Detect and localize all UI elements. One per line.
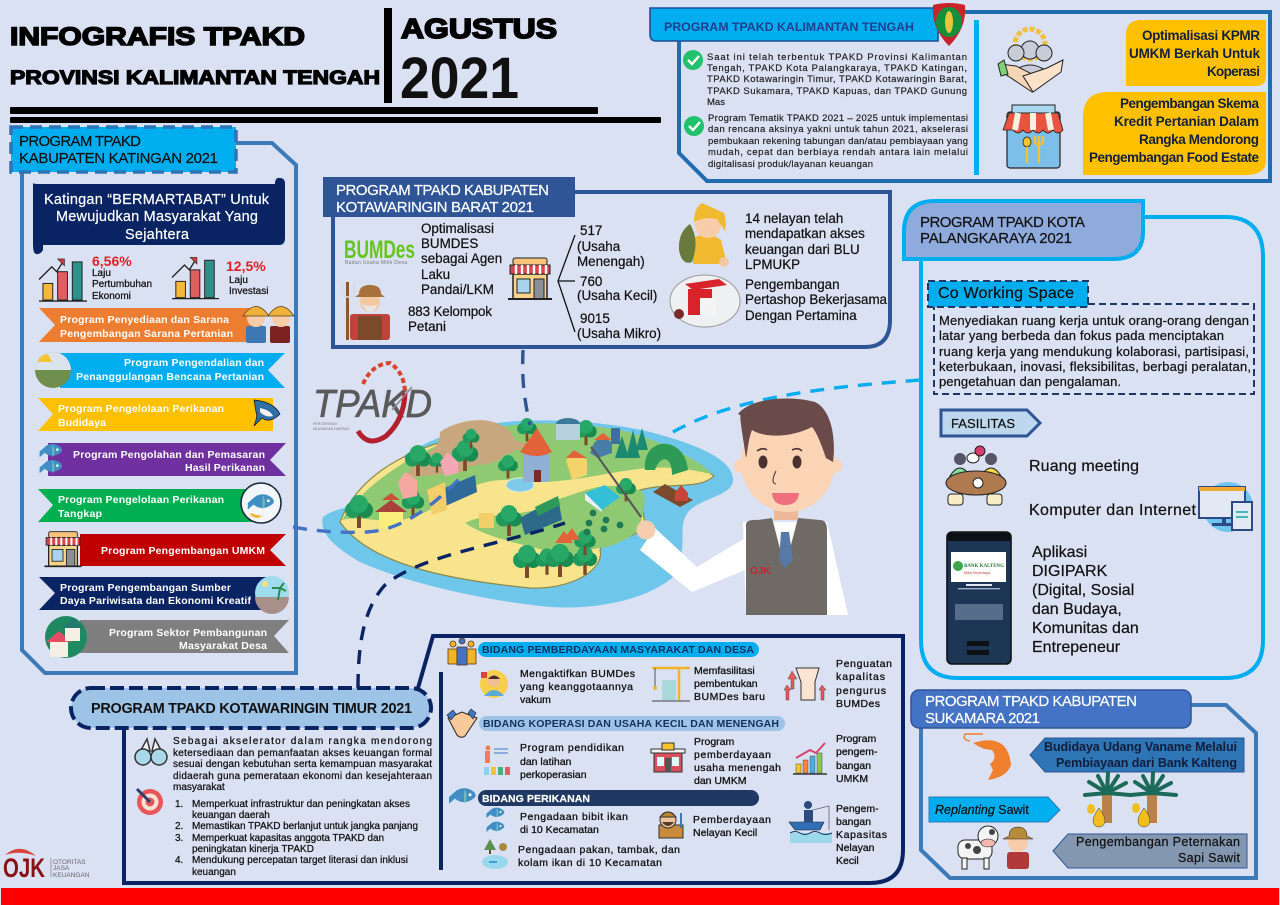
icon: beach [255,576,289,614]
icon: shrimp [964,734,1011,780]
paragraph: tpakd formed: Tengah, TPAKD Kota Palangkaraya, TPAKD Katingan, [707,63,967,74]
paragraph: tpakd formed: TPAKD Sukamara, TPAKD Kapuas, dan TPAKD Gunung [707,86,967,97]
section: koperasi: bangan [836,760,871,772]
medium business count: 517 [580,223,602,238]
branch lines [558,235,575,332]
upper land [342,423,712,521]
vest logo: OJK [750,566,771,577]
icon: community [448,638,476,665]
section: perikanan: bangan [836,816,871,828]
icon: oil palms [1085,773,1176,827]
section: perikanan: Pemberdayaan [693,814,771,826]
icon: fisherman [679,203,729,267]
panel: kotawaringin barat: Laku [421,267,450,282]
icon: crane [652,668,690,701]
arrow: shrimp farming: Budidaya Udang Vaname Melalui [1044,740,1237,754]
section: perikanan: Kapasitas [836,829,887,841]
arrow: replanting: Replanting Sawit [935,803,1029,817]
katingan outline [22,143,296,673]
icon: fish pair [40,444,62,473]
year: 2021 [400,46,519,111]
panel: kotawaringin barat: Petani [408,319,446,334]
teal building [585,485,620,512]
nelayan text: 14 nelayan telah [745,211,843,226]
check icon two [684,116,704,136]
arrow: shrimp farming: Pembiayaan dari Bank Kalteng [1056,756,1237,770]
fasilitas tag: FASILITAS [951,416,1015,431]
paragraph: accelerator: didaerah guna pemerataan ekonomi dan kesejahteraan [173,771,432,782]
brows [757,449,802,451]
numbered list [175,799,418,878]
section: perikanan: BIDANG PERIKANAN [482,793,590,805]
row houses [428,475,477,512]
icon: pertashop [670,275,740,327]
icon: handshake with people [998,29,1063,92]
ribbon 7 navy [39,576,289,614]
ribbon 4 purple [40,443,286,476]
pertashop text: Pengembangan [745,277,840,292]
panel: kotawaringin timur [71,636,903,883]
panel: palangkaraya: PROGRAM TPAKD KOTA [920,214,1085,231]
icon: fish plate [241,483,281,523]
panel: kotawaringin barat: PROGRAM TPAKD KABUPATEN [336,182,549,199]
numbered list: keuangan [192,867,236,878]
green roof building [520,496,562,535]
nose [773,471,776,484]
panel: kotawaringin barat: keuangan dari BLU [745,242,860,257]
paragraph: tpakd formed: Saat ini telah terbentuk TPAKD Provinsi Kalimantan [707,52,967,63]
facility: computer text: Komputer dan Internet [1029,502,1197,519]
logo: tpakd [313,363,432,441]
sukamara outline [921,705,1256,878]
face [741,412,835,512]
logo: tpakd: PERCEPATAN [313,422,337,426]
illustration: presenter [591,398,848,615]
paragraph: accelerator: sesuai dengan kebutuhan serta kemampuan masyarakat [173,759,432,770]
digipark text: (Digital, Sosial [1032,582,1134,599]
panel: katingan: Mewujudkan Masyarakat Yang [56,209,258,225]
kalteng outline [679,12,1270,181]
pond [506,478,534,492]
co working description: pengetahuan dan pengalaman. [939,374,1121,389]
connector: timur [358,523,565,688]
bumdes text: Optimalisasi [421,221,494,236]
numbered list: 1. [175,799,183,810]
logo: bumdes: Badan Usaha Milik Desa [345,260,407,266]
logo: ojk [3,849,90,883]
panel: kotawaringin barat: (Usaha Mikro) [577,326,661,341]
section: koperasi: dan UMKM [694,775,747,787]
paragraph: tpakd formed: TPAKD Kotawaringin Timur, TPAKD Kotawaringin Barat, [707,74,967,85]
numbered list: 4. [175,855,183,866]
ribbon 7 navy: Program Pengembangan Sumber [60,582,231,594]
paragraph: accelerator [173,736,432,793]
icon: fist up [784,668,826,700]
conifers [615,428,648,458]
farmer group text: 883 Kelompok [408,304,492,319]
ribbon 2 blue: Penanggulangan Bencana Pertanian [76,371,264,383]
hand [636,520,656,540]
arm [640,528,750,592]
icon: person circle [480,670,508,698]
logo: ojk: OJK [3,853,45,883]
section: koperasi: pengem- [836,746,878,758]
callout: food estate: Pengembangan Skema [1120,96,1259,111]
numbered list: 2. [175,821,183,832]
panel: kalimantan tengah: PROGRAM TPAKD KALIMANTAN TENGAH [664,20,914,34]
section: perikanan: Kecil [836,855,859,867]
icon: binoculars [135,739,167,765]
panel: kotawaringin barat: Menengah) [577,254,645,269]
hair [738,398,834,462]
month: AGUSTUS [401,13,557,44]
icon: emblem [933,3,965,46]
panel: katingan: Sejahtera [125,227,190,243]
panel: kotawaringin barat: LPMUKP [745,257,800,272]
panel: kotawaringin barat: Pandai/LKM [421,282,494,297]
section: pemberdayaan: kapalitas [836,671,885,683]
connector: katingan [293,473,465,532]
paragraph: tematik program: pembukaan rekening tabungan dan/atau pembiayaan yang [708,136,968,147]
icon: food store [1003,105,1063,168]
ribbon 1 orange [39,306,294,343]
paragraph: accelerator: masyarakat [173,782,225,793]
panel: kotawaringin barat: mendapatkan akses [745,226,865,241]
panel: palangkaraya: PALANGKARAYA 2021 [920,230,1072,247]
slogan text: Katingan “BERMARTABAT” Untuk [44,192,270,208]
section: perikanan: Nelayan [836,842,875,854]
numbered list: 3. [175,833,183,844]
section: koperasi: pemberdayaan [694,749,771,761]
stat: growth: Pertumbuhan [92,279,152,290]
icon: boat [789,801,832,843]
arrow: cattle: Pengembangan Peternakan [1076,835,1240,849]
panel: kotawaringin barat: KOTAWARINGIN BARAT 2021 [336,199,534,216]
panel: katingan: KABUPATEN KATINGAN 2021 [19,150,218,167]
panel: sukamara: SUKAMARA 2021 [925,710,1040,727]
section: koperasi: BIDANG KOPERASI DAN USAHA KECIL DAN MENENGAH [483,718,779,730]
numbered list: keuangan daerah [192,810,270,821]
panel: kotawaringin barat: Dengan Pertamina [745,308,857,323]
palangkaraya outline [921,217,1263,678]
sukamara heading [911,690,1191,728]
section: koperasi: Program [836,733,877,745]
ribbon 5 green: Program Pengelolaan Perikanan [58,494,224,506]
small houses [398,428,620,543]
section: pemberdayaan: pengurus [836,685,886,697]
logo: bumdes: BUMDes [344,236,415,264]
callout: kpmr: UMKM Berkah Untuk [1129,46,1260,61]
logo: tpakd: KEUANGAN DAERAH [313,427,350,431]
dashed description box [934,304,1254,394]
section: koperasi: dan latihan [520,756,572,768]
fasilitas tag [941,410,1040,436]
section: perikanan: Pengadaan pakan, tambak, dan [518,844,680,856]
numbered list: Memastikan TPAKD berlanjut untuk jangka panjang [192,821,418,832]
paragraph: tematik program: Program Tematik TPAKD 2021 – 2025 untuk implementasi [708,113,968,124]
numbered list: Mendukung percepatan target literasi dan inklusi [192,855,408,866]
stat: investment: 12,5% [226,258,266,274]
section: pemberdayaan [448,638,892,710]
facility: meeting text: Ruang meeting [1029,458,1139,475]
paragraph: tematik program: dan rencana aksinya yakni untuk tahun 2021, akselerasi [708,124,968,135]
brown hill [405,420,530,478]
katingan heading text: PROGRAM TPAKD [19,133,141,150]
co working description: keterbukaan, inovasi, fleksibilitas, berbagi peralatan, [939,359,1251,374]
arrow: cattle: Sapi Sawit [1178,851,1241,865]
co working description [939,313,1251,389]
tie [779,532,793,568]
arrow: shrimp farming [1030,738,1244,772]
ribbon 2 blue [35,352,285,388]
icon: fisherman face [659,812,683,838]
panel: kalimantan tengah [650,3,1270,181]
section: pemberdayaan: BIDANG PEMBERDAYAAN MASYARAKAT DAN DESA [482,644,754,656]
phone: digipark [947,532,1011,664]
icon: teacher board [484,745,512,775]
section: perikanan: kolam ikan di 10 Kecamatan [518,857,662,869]
paragraph: tematik program [708,113,968,170]
paragraph: tematik program: digitalisasi produk/layanan keuangan [708,159,873,170]
callout: kpmr: Koperasi [1207,64,1260,79]
paragraph: tpakd formed: Mas [707,97,725,108]
katingan heading [11,127,236,172]
stat: growth: Laju [92,268,111,279]
numbered list: Memperkuat kapasitas anggota TPAKD dan [192,833,384,844]
stat: investment [172,257,268,299]
section: koperasi: UMKM [836,773,868,785]
logo: ojk: KEUANGAN [53,872,90,879]
timur inner divider [439,672,443,870]
paragraph: tpakd formed [707,52,967,108]
timur heading pill [71,688,431,728]
paragraph: accelerator: ketersediaan dan pemanfaatan akses keuangan formal [173,748,432,759]
icon: bar growth [793,743,827,774]
ribbon 5 green: Tangkap [58,508,102,520]
ribbon 6 red [44,532,286,567]
paragraph: tematik program: mudah, cepat dan berbiaya rendah antara lain melalui [708,147,968,158]
icon: shop [508,258,552,300]
phone: digipark: Mitra Terpercaya [964,571,990,575]
ribbon 1 orange: Pengembangan Sarana Pertanian [60,328,233,340]
digipark text: DIGIPARK [1032,563,1108,580]
icon: handshake [447,709,477,737]
logo: tpakd: TPAKD [313,383,432,426]
subtitle: province: PROVINSI KALIMANTAN TENGAH [10,68,380,89]
icon: shop red [651,743,685,772]
section: pemberdayaan: BUMDes baru [694,691,765,703]
section: pemberdayaan: Memfasilitasi [694,665,755,677]
mouth [772,493,799,505]
co working description: latar yang berbeda dan fokus pada menciptakan [939,328,1224,343]
stat: investment: Investasi [229,286,268,297]
stat: growth [39,253,152,302]
arrow: replanting [929,797,1060,822]
illustration: island [322,418,733,608]
logo: ojk: OTORITAS [53,859,86,866]
connector: kotawaringin barat [523,350,530,425]
panel: sukamara [911,690,1256,878]
digipark text: Entrepeneur [1032,639,1121,656]
ribbon 6 red: Program Pengembangan UMKM [101,545,265,557]
section: koperasi: usaha menengah [694,762,781,774]
ribbon 2 blue: Program Pengendalian dan [124,357,264,369]
sand [340,428,714,588]
pagoda [375,493,407,527]
section: perikanan: di 10 Kecamatan [520,824,599,836]
icon: farmer [342,282,390,340]
section: koperasi: Program pendidikan [520,742,624,754]
small business count: 760 [580,274,602,289]
panel: kotawaringin barat: BUMDES [421,236,478,251]
digipark text: Aplikasi [1032,544,1087,561]
section: pemberdayaan: Penguatan [836,658,892,670]
section: pemberdayaan: BUMDes [836,698,880,710]
section: pemberdayaan: Mengaktifkan BUMDes [520,668,635,680]
section: perikanan: Nelayan Kecil [693,827,757,839]
panel: kotawaringin barat: sebagai Agen [421,251,502,266]
panel: kotawaringin timur: PROGRAM TPAKD KOTAWARINGIN TIMUR 2021 [91,701,412,717]
ribbon 7 navy: Daya Pariwisata dan Ekonomi Kreatif [60,595,252,607]
hedge arch [645,444,688,475]
panel: sukamara: PROGRAM TPAKD KABUPATEN [925,693,1137,710]
icon: fish school [486,808,504,832]
bottom red bar [1,888,1279,905]
barat heading [323,177,575,217]
co working heading [928,281,1088,307]
panel: kotawaringin barat: Pertashop Bekerjasama [745,292,888,307]
lower land [465,486,645,556]
header rule two [10,117,661,123]
micro business count: 9015 [580,311,610,326]
check icon one [683,50,703,70]
digipark text [1032,544,1139,656]
slogan banner [33,178,285,254]
dock [653,484,693,507]
ribbon 4 purple: Hasil Perikanan [185,462,265,474]
callout: food estate: Pengembangan Food Estate [1089,150,1259,165]
section: pemberdayaan: pembentukan [694,678,758,690]
ribbon 8 gray [45,616,289,658]
vertical divider [974,20,979,175]
panel: palangkaraya: Co Working Space [938,285,1074,302]
windmill house [520,428,552,482]
water [322,420,733,608]
icon: tuna [254,400,280,426]
callout: food estate: Kredit Pertanian Dalam [1114,114,1259,129]
callout: kpmr [1126,20,1266,86]
panel: katingan [11,127,296,673]
icon: cow [958,826,998,869]
section: perikanan: Pengem- [836,803,879,815]
title: infografis: INFOGRAFIS TPAKD [10,23,305,51]
icon: village [45,616,87,658]
digipark text: dan Budaya, [1032,601,1122,618]
icon: target [137,789,163,815]
section: koperasi: perkoperasian [520,769,587,781]
pointer stick [591,447,641,517]
barat outline [333,192,890,347]
section: pemberdayaan: vakum [520,694,551,706]
co working description: Menyediakan ruang kerja untuk orang-orang dengan [939,313,1249,328]
panel: kotawaringin barat: (Usaha Kecil) [577,288,657,303]
trees [345,418,636,578]
neck [774,500,798,520]
ribbon 1 orange: Program Penyediaan dan Sarana [60,314,229,326]
palangkaraya heading [904,201,1143,259]
connector lines [293,350,921,688]
callout: food estate: Rangka Mendorong [1139,132,1259,147]
icon: fish [449,788,476,804]
section: koperasi: Program [694,736,735,748]
section: koperasi [447,709,878,787]
co working description: ruang kerja yang mendukung kolaborasi, partisipasi, [939,344,1249,359]
eyes [758,456,802,468]
ribbon 4 purple: Program Pengolahan dan Pemasaran [73,449,265,461]
timur outline [124,636,903,883]
header rule one [10,107,598,114]
ears [734,459,842,473]
icon: pond [482,839,508,869]
panel: kotawaringin barat [323,177,890,347]
paragraph: accelerator: Sebagai akselerator dalam rangka mendorong [173,736,432,747]
digipark text: Komunitas dan [1032,620,1139,637]
numbered list: peningkatan kinerja TPAKD [192,844,314,855]
icon: computer [1199,482,1253,532]
panel: kotawaringin barat: (Usaha [577,239,621,254]
kalteng heading [650,8,938,41]
callout: food estate [1083,92,1266,175]
ribbon 5 green [38,483,281,523]
ribbon 3 yellow: Program Pengelolaan Perikanan [58,403,224,415]
title divider bar [384,8,392,103]
panel: palangkaraya [904,201,1263,678]
section: perikanan [449,788,887,869]
numbered list: Memperkuat infrastruktur dan peningkatan akses [192,799,410,810]
stat: growth: 6,56% [92,253,132,269]
logo: ojk: JASA [53,865,70,872]
ribbon 3 yellow: Budidaya [58,417,106,429]
icon: rancher [1003,827,1033,869]
section: perikanan: Pengadaan bibit ikan [520,811,628,823]
torso sleeve [743,522,848,615]
ribbon 8 gray: Masyarakat Desa [179,640,267,652]
icon: meeting [946,446,1006,505]
phone: digipark: BANK KALTENG [964,564,1004,569]
vest [746,518,827,615]
water tower [556,418,580,440]
ribbon 3 yellow [38,398,280,431]
fish ponds [584,510,623,535]
section: pemberdayaan: yang keanggotaannya [520,681,633,693]
logo: bumdes [344,236,415,266]
connector: palangkaraya [673,380,921,432]
arrow: cattle [1053,834,1247,868]
title block [10,8,661,123]
stat: investment: Laju [229,275,248,286]
icon: farmers [243,306,294,343]
ribbon 8 gray: Program Sektor Pembangunan [109,627,267,639]
callout: kpmr: Optimalisasi KPMR [1142,28,1260,43]
stat: growth: Ekonomi [92,291,131,302]
